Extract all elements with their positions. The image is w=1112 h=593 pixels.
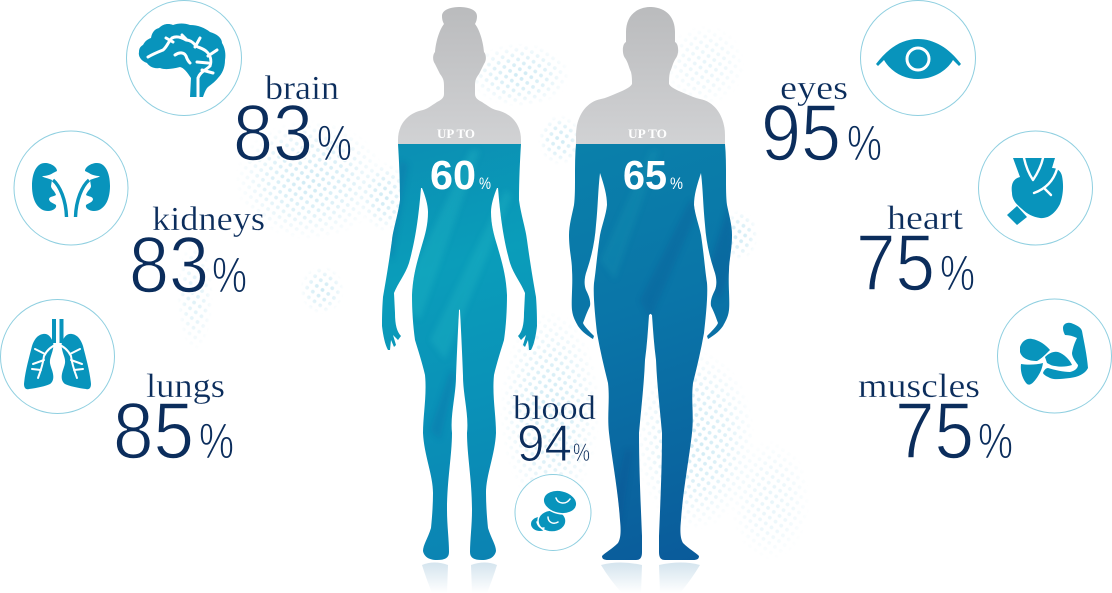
value: 94%: % bbox=[573, 439, 590, 467]
panel: eyes bbox=[761, 0, 976, 177]
value: 85%: % bbox=[199, 413, 234, 469]
panel: muscles bbox=[858, 299, 1112, 475]
label: kidneys: kidneys bbox=[152, 201, 265, 238]
icon: kidneys bbox=[14, 131, 128, 245]
value: 83%: % bbox=[212, 247, 247, 303]
icon: lungs bbox=[0, 300, 114, 414]
value: 65%: 65 bbox=[623, 152, 667, 198]
value: 75%: % bbox=[940, 245, 975, 301]
value: 95%: 95 bbox=[761, 88, 841, 177]
value: 85%: 85 bbox=[113, 386, 194, 475]
value: 75%: % bbox=[978, 413, 1013, 469]
icon: blood cells bbox=[515, 474, 591, 550]
figure: woman silhouette 60% water bbox=[382, 7, 537, 588]
icon: eye bbox=[860, 0, 976, 116]
value: 75%: 75 bbox=[856, 218, 935, 307]
foot reflection: man bbox=[601, 562, 700, 593]
value: 65%: % bbox=[670, 174, 683, 193]
value: 83%: 83 bbox=[233, 88, 313, 177]
value: 95%: % bbox=[847, 115, 882, 171]
icon: brain bbox=[126, 0, 242, 116]
value: 60%: 60 bbox=[430, 152, 476, 198]
panel: heart bbox=[856, 131, 1092, 307]
icon: heart bbox=[978, 131, 1092, 245]
panel: brain bbox=[126, 0, 352, 177]
panel: blood bbox=[513, 390, 596, 550]
value: 75%: 75 bbox=[895, 386, 974, 475]
icon: flexed arm muscles bbox=[998, 299, 1112, 413]
panel: kidneys bbox=[14, 131, 265, 309]
label: eyes: eyes bbox=[780, 70, 848, 107]
woman body fill bbox=[382, 7, 537, 560]
label: heart: heart bbox=[887, 200, 964, 237]
label: lungs: lungs bbox=[146, 368, 225, 405]
label: blood: blood bbox=[513, 390, 596, 427]
panel: lungs bbox=[0, 300, 234, 475]
label: UP TO: UP TO bbox=[437, 127, 475, 141]
label: muscles: muscles bbox=[858, 368, 980, 405]
value: 83%: 83 bbox=[129, 220, 209, 309]
value: 83%: % bbox=[317, 115, 352, 171]
man body fill bbox=[569, 7, 732, 560]
label: brain: brain bbox=[265, 70, 339, 107]
value: 94%: 94 bbox=[517, 415, 572, 473]
foot reflection: woman bbox=[422, 562, 497, 593]
background dot pattern bbox=[181, 35, 800, 544]
value: 60%: % bbox=[479, 174, 491, 193]
figure: man silhouette 65% water bbox=[569, 7, 732, 588]
label: UP TO: UP TO bbox=[628, 127, 667, 141]
